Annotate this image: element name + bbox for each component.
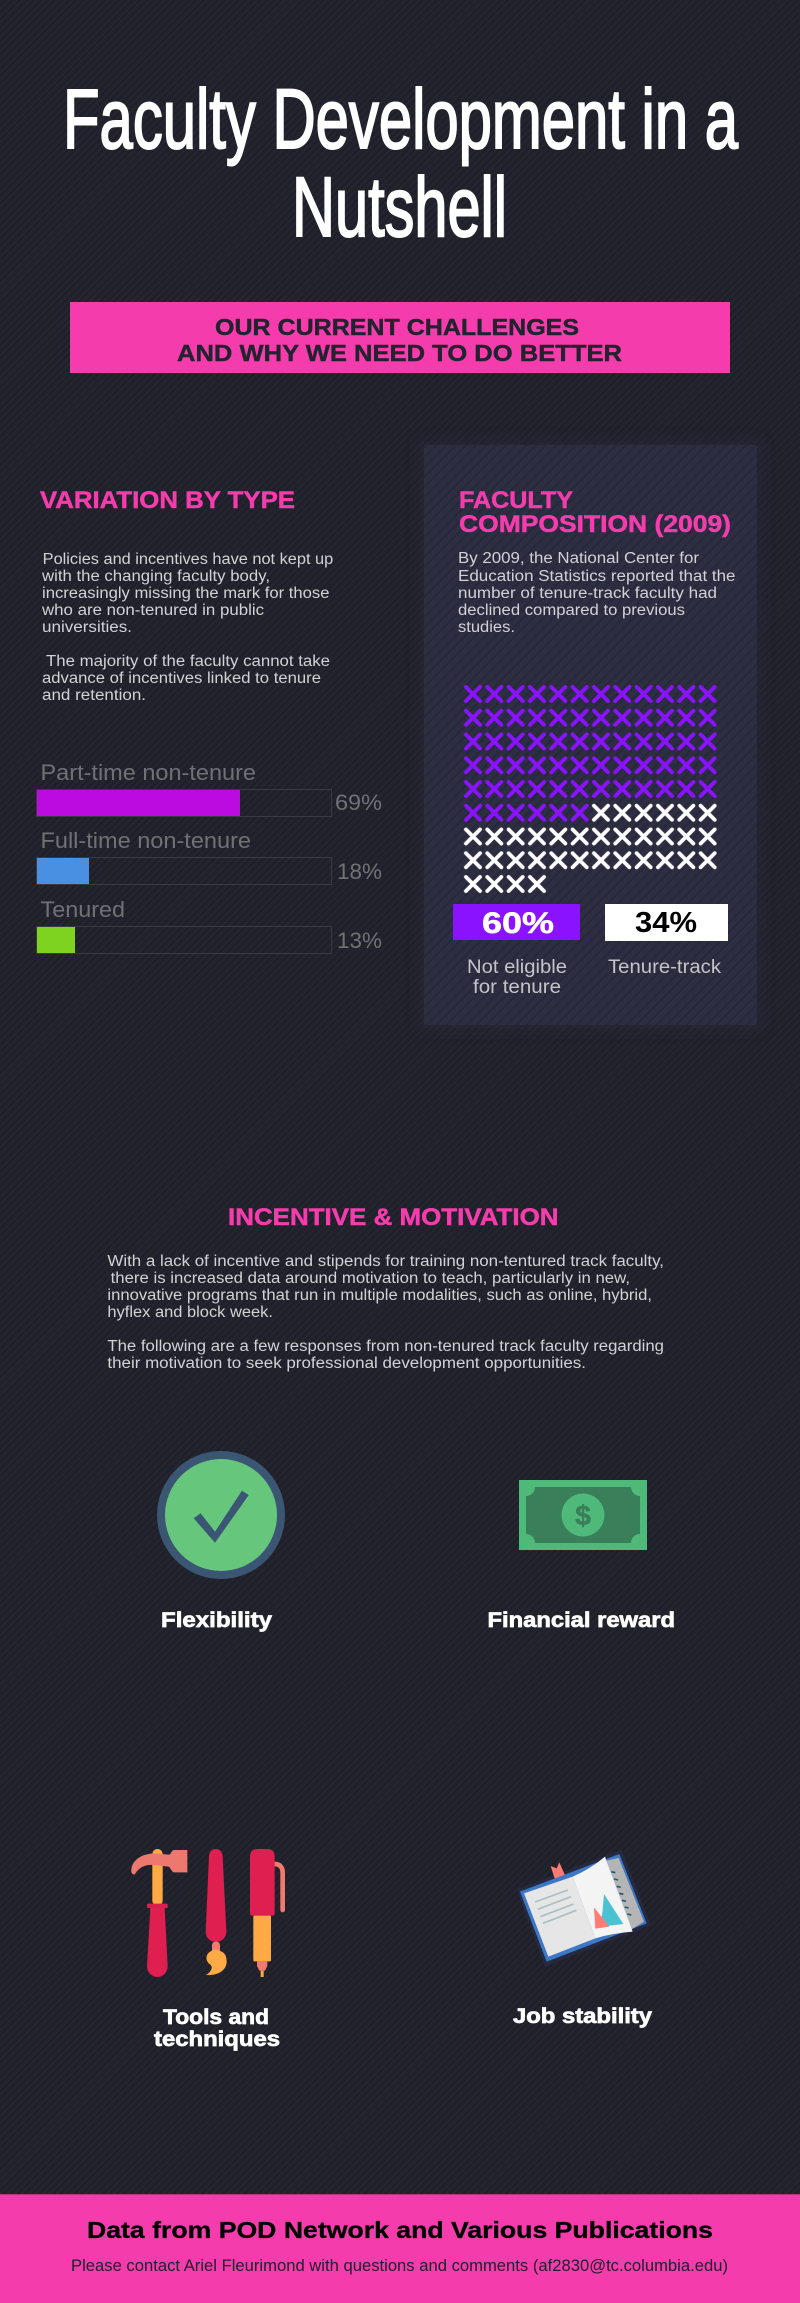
text block: national center: By 2009, the National Center for xyxy=(458,550,699,567)
label: tools and techniques: techniques xyxy=(154,2028,280,2051)
icon: money bill xyxy=(519,1480,647,1550)
pictogram: cross marks xyxy=(462,682,718,896)
label: tools and techniques: Tools and xyxy=(163,2006,269,2029)
text block: policies: increasingly missing the mark for those xyxy=(42,585,330,602)
text block: national center: number of tenure-track faculty had xyxy=(458,585,717,602)
label: tools and techniques xyxy=(154,2006,280,2051)
stat: 60 percent: Not eligible xyxy=(467,957,567,978)
text block: national center: declined compared to previous xyxy=(458,602,685,619)
footer contact: Please contact Ariel Fleurimond with questions and comments (af2830@tc.columbia.edu) xyxy=(71,2256,728,2275)
heading: variation by type: VARIATION BY TYPE xyxy=(40,487,295,514)
banner: current challenges: OUR CURRENT CHALLENGES xyxy=(215,314,579,340)
text block: motivation: hyflex and block week. xyxy=(107,1304,273,1321)
text block: policies: who are non-tenured in public xyxy=(41,602,264,619)
icon: open book xyxy=(517,1849,651,1967)
footer heading: Data from POD Network and Various Publications xyxy=(87,2217,713,2243)
stat: 34 percent: 34% xyxy=(635,907,697,939)
label: job stability: Job stability xyxy=(513,2005,652,2028)
text block: motivation: innovative programs that run in multiple modalities, such as online, hybrid, xyxy=(107,1287,652,1304)
icon: paint brush xyxy=(206,1849,227,1975)
stat: 60 percent xyxy=(453,904,580,998)
heading: incentive and motivation: INCENTIVE & MOTIVATION xyxy=(228,1204,558,1231)
icon: money bill: $ xyxy=(575,1500,591,1531)
bar: tenured: Tenured xyxy=(40,897,125,922)
bar: full-time non-tenure: Full-time non-tenure xyxy=(40,828,251,853)
bar: full-time non-tenure xyxy=(36,828,382,884)
text block: policies: The majority of the faculty cannot take xyxy=(46,653,330,670)
panel: faculty composition xyxy=(418,439,763,1031)
label: financial reward: Financial reward xyxy=(488,1609,675,1632)
text block: motivation: their motivation to seek professional development opportunities. xyxy=(107,1355,586,1372)
bar: part-time non-tenure xyxy=(36,760,382,816)
label: flexibility: Flexibility xyxy=(161,1609,272,1632)
text block: motivation xyxy=(107,1253,664,1372)
heading: faculty composition: FACULTY xyxy=(459,487,573,514)
text block: policies: Policies and incentives have not kept up xyxy=(43,551,333,568)
bar: part-time non-tenure: Part-time non-tenure xyxy=(40,760,256,785)
stat: 34 percent: Tenure-track xyxy=(608,957,722,978)
text block: national center xyxy=(458,550,736,636)
stat: 60 percent: 60% xyxy=(482,907,554,940)
text block: national center: studies. xyxy=(458,619,515,636)
banner: current challenges xyxy=(70,302,730,373)
bar: full-time non-tenure: 18% xyxy=(337,859,382,884)
title xyxy=(63,72,738,254)
panel: variation by type xyxy=(36,487,382,954)
stat: 34 percent xyxy=(605,904,728,978)
icon: hammer xyxy=(131,1849,187,1977)
text block: policies xyxy=(41,551,333,704)
text block: national center: Education Statistics reported that the xyxy=(458,568,736,585)
heading: faculty composition: COMPOSITION (2009) xyxy=(459,511,731,538)
footer xyxy=(0,2194,800,2303)
bar: tenured: 13% xyxy=(337,928,382,953)
bar chart: faculty type xyxy=(36,760,382,954)
text block: policies: with the changing faculty body, xyxy=(41,568,270,585)
heading: faculty composition xyxy=(459,487,731,538)
text block: policies: and retention. xyxy=(42,687,146,704)
text block: policies: advance of incentives linked to tenure xyxy=(42,670,321,687)
text block: motivation: there is increased data around motivation to teach, particularly in new, xyxy=(111,1270,630,1287)
icon: tools xyxy=(131,1849,283,1977)
bar: tenured xyxy=(36,897,382,954)
stat: 60 percent: for tenure xyxy=(473,977,561,998)
section: incentive and motivation xyxy=(107,1204,664,1372)
text block: motivation: With a lack of incentive and stipends for training non-tentured track faculty, xyxy=(107,1253,664,1270)
icon: pen xyxy=(250,1849,283,1977)
icon: check mark xyxy=(157,1451,285,1579)
title: Nutshell xyxy=(292,160,507,254)
bar: part-time non-tenure: 69% xyxy=(335,790,382,815)
banner: current challenges: AND WHY WE NEED TO DO BETTER xyxy=(177,340,622,366)
text block: policies: universities. xyxy=(42,619,132,636)
text block: motivation: The following are a few responses from non-tenured track faculty regarding xyxy=(107,1338,664,1355)
